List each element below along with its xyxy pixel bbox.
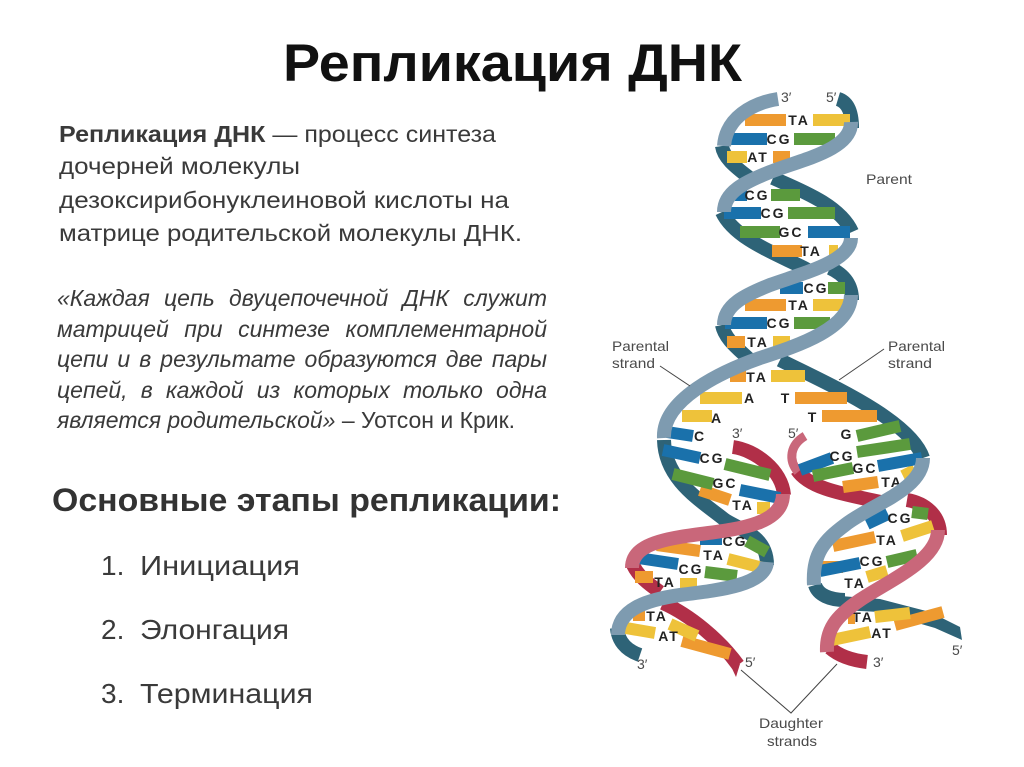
- base pair letters: CG: [766, 131, 792, 147]
- base pair letters: A: [744, 390, 756, 406]
- strand end labels: 3′: [873, 654, 884, 670]
- base pair letters: GC: [852, 460, 878, 476]
- label: parent: Parent: [866, 171, 912, 187]
- base pair letters: AT: [658, 628, 680, 644]
- base pair letters: TA: [732, 497, 754, 513]
- back strands: daughter red: [632, 436, 940, 677]
- text block: definition: Репликация ДНК — процесс синтеза: [59, 121, 496, 147]
- base pair letters: TA: [800, 243, 822, 259]
- text block: definition: матрице родительской молекулы ДНК.: [59, 220, 522, 246]
- list: stages: 1.: [101, 550, 124, 581]
- strand end labels: 5′: [826, 89, 837, 105]
- chart: DNA replication helix: [612, 89, 963, 749]
- text block: Watson and Crick quote: является родительской» – Уотсон и Крик.: [57, 407, 515, 433]
- title: Репликация ДНК: [283, 34, 743, 93]
- base pair letters: GC: [778, 224, 804, 240]
- text block: definition: [59, 121, 522, 246]
- list: stages: [101, 550, 313, 709]
- base pair letters: TA: [703, 547, 725, 563]
- label: daughter strands: [741, 664, 837, 749]
- base pair letters: TA: [881, 474, 903, 490]
- label: daughter strands: strands: [767, 733, 817, 749]
- base pair letters: CG: [830, 448, 854, 464]
- strand end labels: [637, 89, 963, 672]
- list: stages: 2.: [101, 614, 124, 645]
- base pair letters: CG: [722, 533, 748, 549]
- label: parental strand right: [839, 338, 945, 380]
- label: parental strand left: strand: [612, 355, 655, 371]
- base pair letters: T: [781, 390, 791, 406]
- label: daughter strands: Daughter: [759, 715, 823, 731]
- strand end labels: 3′: [781, 89, 792, 105]
- front strands: gray parental: [618, 99, 923, 635]
- base pair letters: TA: [852, 609, 874, 625]
- label: parental strand left: [612, 338, 690, 386]
- base pair letters: CG: [760, 205, 786, 221]
- text block: Watson and Crick quote: цепей, в каждой из которых только одна: [57, 376, 547, 402]
- base pair letters: TA: [844, 575, 866, 591]
- base pair letters: G: [841, 426, 853, 442]
- text block: definition: дезоксирибонуклеиновой кислоты на: [59, 187, 509, 213]
- text block: Watson and Crick quote: матрицей при синтезе комплементарной: [57, 316, 547, 342]
- base pair letters: TA: [746, 369, 768, 385]
- text block: Watson and Crick quote: цепи и в результате образуются две пары: [57, 346, 547, 372]
- heading: main stages: Основные этапы репликации:: [52, 482, 561, 518]
- label: parental strand left: Parental: [612, 338, 669, 354]
- strand end labels: 5′: [788, 425, 799, 441]
- base pair letters: CG: [744, 187, 770, 203]
- base pair letters: TA: [788, 297, 810, 313]
- list: stages: Терминация: [140, 678, 313, 709]
- front strands: pink daughter: [632, 494, 938, 652]
- base pair letters: TA: [876, 532, 898, 548]
- text block: definition: дочерней молекулы: [59, 153, 300, 179]
- list: stages: 3.: [101, 678, 124, 709]
- base pair letters: T: [808, 409, 818, 425]
- text block: Watson and Crick quote: «Каждая цепь двуцепочечной ДНК служит: [57, 285, 547, 311]
- base pair letters: CG: [678, 561, 704, 577]
- base pair letters: CG: [766, 315, 792, 331]
- base pair letters: AT: [871, 625, 893, 641]
- base pair letters: CG: [700, 450, 724, 466]
- base pair letters: TA: [654, 574, 676, 590]
- base pair letters: CG: [888, 510, 912, 526]
- base pair letters: TA: [747, 334, 769, 350]
- label: parental strand right: Parental: [888, 338, 945, 354]
- label: parental strand right: strand: [888, 355, 932, 371]
- base pairs: green: [673, 139, 928, 576]
- base pairs: yellow: [620, 120, 933, 640]
- strand end labels: 5′: [952, 642, 963, 658]
- base pair letters: CG: [804, 280, 828, 296]
- back strands: dark parental: [617, 99, 962, 655]
- list: stages: Элонгация: [140, 614, 289, 645]
- base pair letters: A: [711, 410, 723, 426]
- strand end labels: 5′: [745, 654, 756, 670]
- base pair letters: GC: [712, 475, 738, 491]
- base pair letters: TA: [788, 112, 810, 128]
- base pairs: blue: [638, 139, 922, 571]
- strand end labels: 3′: [732, 425, 743, 441]
- base pair letters: AT: [747, 149, 769, 165]
- strand end labels: 3′: [637, 656, 648, 672]
- base pair letters: [646, 112, 912, 644]
- base pairs: orange: [633, 120, 943, 654]
- text block: Watson and Crick quote: [56, 285, 547, 433]
- base pair letters: CG: [860, 553, 884, 569]
- base pair letters: TA: [646, 608, 668, 624]
- base pair letters: C: [694, 428, 706, 444]
- list: stages: Инициация: [140, 550, 300, 581]
